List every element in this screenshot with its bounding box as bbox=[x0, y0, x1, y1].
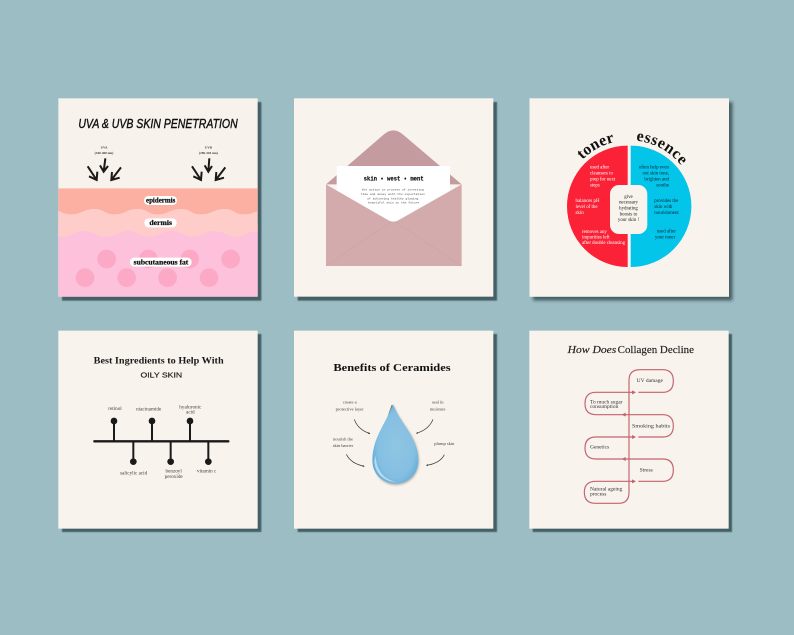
flow labels: Smoking habits bbox=[632, 424, 670, 430]
flow labels: consumption bbox=[590, 404, 619, 410]
label: dermis bbox=[144, 218, 177, 227]
panel: skin west ment envelope bbox=[294, 98, 497, 301]
essence half circle bbox=[631, 146, 691, 267]
layer: subcutaneous fat bbox=[58, 223, 258, 297]
ingredient labels bbox=[108, 404, 217, 480]
layer: dermis bbox=[41, 203, 258, 237]
envelope body bbox=[326, 184, 462, 266]
benefit labels: plump skin bbox=[434, 441, 455, 446]
flow labels: Genetics bbox=[590, 444, 609, 450]
toner half circle bbox=[567, 146, 628, 267]
flow labels bbox=[590, 378, 670, 497]
note definition: the action or process of investing bbox=[362, 188, 424, 192]
panel: toner vs essence bbox=[530, 98, 734, 303]
essence points: out skin tone, bbox=[642, 172, 669, 176]
benefit labels: nourish the bbox=[333, 436, 353, 441]
toner points: level of the bbox=[576, 205, 598, 210]
essence points: skin with bbox=[654, 205, 673, 210]
flow labels: Natural ageing bbox=[590, 487, 623, 493]
title: Collagen Decline bbox=[618, 345, 694, 356]
benefit labels bbox=[333, 400, 455, 448]
center text: give bbox=[624, 195, 633, 200]
ingredient labels: acid bbox=[186, 409, 195, 415]
ingredient labels: retinol bbox=[108, 406, 122, 412]
note definition: of achieving healthy glowing bbox=[367, 196, 419, 200]
benefit labels: skin barrier bbox=[333, 443, 354, 448]
label: subcutaneous fat: subcutaneous fat bbox=[134, 258, 189, 266]
toner points: used after bbox=[590, 166, 610, 170]
title: UVA and UVB: UVA & UVB SKIN PENETRATION bbox=[78, 116, 238, 131]
label: epidermis: epidermis bbox=[146, 197, 176, 205]
essence points: often help even bbox=[639, 166, 670, 170]
toner points: impurities left bbox=[582, 236, 610, 240]
panel: UVA and UVB skin penetration bbox=[41, 98, 268, 301]
heading: essence: essence bbox=[637, 134, 686, 165]
label: UVA: (340-400 nm) bbox=[95, 151, 113, 155]
toner points: removes any bbox=[582, 230, 607, 235]
toner points: balances pH bbox=[576, 199, 600, 204]
ingredient labels: peroxide bbox=[165, 474, 183, 480]
essence points: your toner bbox=[655, 236, 676, 241]
flow labels: process bbox=[590, 491, 606, 497]
flow labels: UV damage bbox=[637, 378, 663, 384]
water drop bbox=[372, 404, 419, 485]
center text: hydrating bbox=[619, 206, 638, 211]
curved arrows bbox=[346, 419, 444, 466]
label: UVB: (290-320 nm) bbox=[199, 151, 218, 155]
essence points: provides the bbox=[654, 199, 678, 204]
title: How Does bbox=[567, 345, 616, 356]
essence points: soothe bbox=[656, 184, 669, 188]
envelope fold lines bbox=[326, 222, 462, 266]
note definition: beautiful skin in the future bbox=[368, 201, 419, 205]
center text: your skin ! bbox=[618, 218, 639, 223]
essence points: used after bbox=[657, 230, 676, 235]
panel: benefits of ceramides bbox=[294, 331, 497, 532]
essence points bbox=[639, 166, 679, 241]
flow arrowheads bbox=[622, 390, 636, 483]
label: UVA: UVA bbox=[101, 146, 108, 150]
title: Benefits of Ceramides bbox=[333, 362, 451, 374]
benefit labels: moisture bbox=[430, 406, 446, 411]
panel: how does collagen decline bbox=[529, 331, 732, 532]
note card bbox=[337, 166, 450, 230]
envelope flap bbox=[326, 130, 462, 184]
toner points: after double cleansing bbox=[582, 241, 626, 246]
center box bbox=[610, 185, 647, 234]
benefit labels: protective layer bbox=[336, 406, 364, 411]
layer: epidermis bbox=[49, 188, 268, 214]
ingredient labels: benzoyl bbox=[166, 469, 182, 475]
ingredient labels: hyaluronic bbox=[179, 404, 202, 410]
toner points: steps bbox=[590, 184, 600, 188]
arrows: UVA bbox=[88, 158, 121, 180]
essence points: nourishment bbox=[654, 211, 679, 216]
fat cells bbox=[76, 250, 240, 287]
title: Best Ingredients to Help With bbox=[94, 355, 224, 365]
toner points bbox=[576, 166, 626, 246]
note heading: skin • west • ment bbox=[364, 176, 424, 183]
center text: boosts to bbox=[620, 212, 638, 217]
ingredient labels: niacinamide bbox=[136, 407, 162, 413]
toner points: prep for next bbox=[590, 178, 616, 182]
heading: toner: toner bbox=[578, 134, 613, 158]
toner points: cleansers to bbox=[590, 172, 614, 176]
timeline bbox=[94, 418, 228, 465]
benefit labels: create a bbox=[343, 400, 357, 405]
label: UVB: UVB bbox=[205, 146, 213, 150]
flow labels: To much sugar bbox=[590, 399, 623, 405]
label: dermis: dermis bbox=[149, 219, 172, 227]
flow labels: Stress bbox=[640, 468, 653, 474]
note definition: time and money with the expectation bbox=[361, 192, 425, 196]
arrows: UVB bbox=[192, 158, 225, 180]
ingredient labels: vitamin c bbox=[197, 469, 217, 475]
panel: best ingredients for oily skin bbox=[58, 331, 261, 532]
subtitle: oily skin: OILY SKIN bbox=[140, 373, 182, 380]
benefit labels: seal in bbox=[432, 400, 444, 405]
toner points: skin bbox=[576, 211, 584, 216]
ingredient labels: salicylic acid bbox=[120, 470, 148, 476]
essence points: brighten and bbox=[644, 178, 670, 182]
center text: necessary bbox=[619, 201, 639, 206]
flow path bbox=[584, 370, 673, 503]
